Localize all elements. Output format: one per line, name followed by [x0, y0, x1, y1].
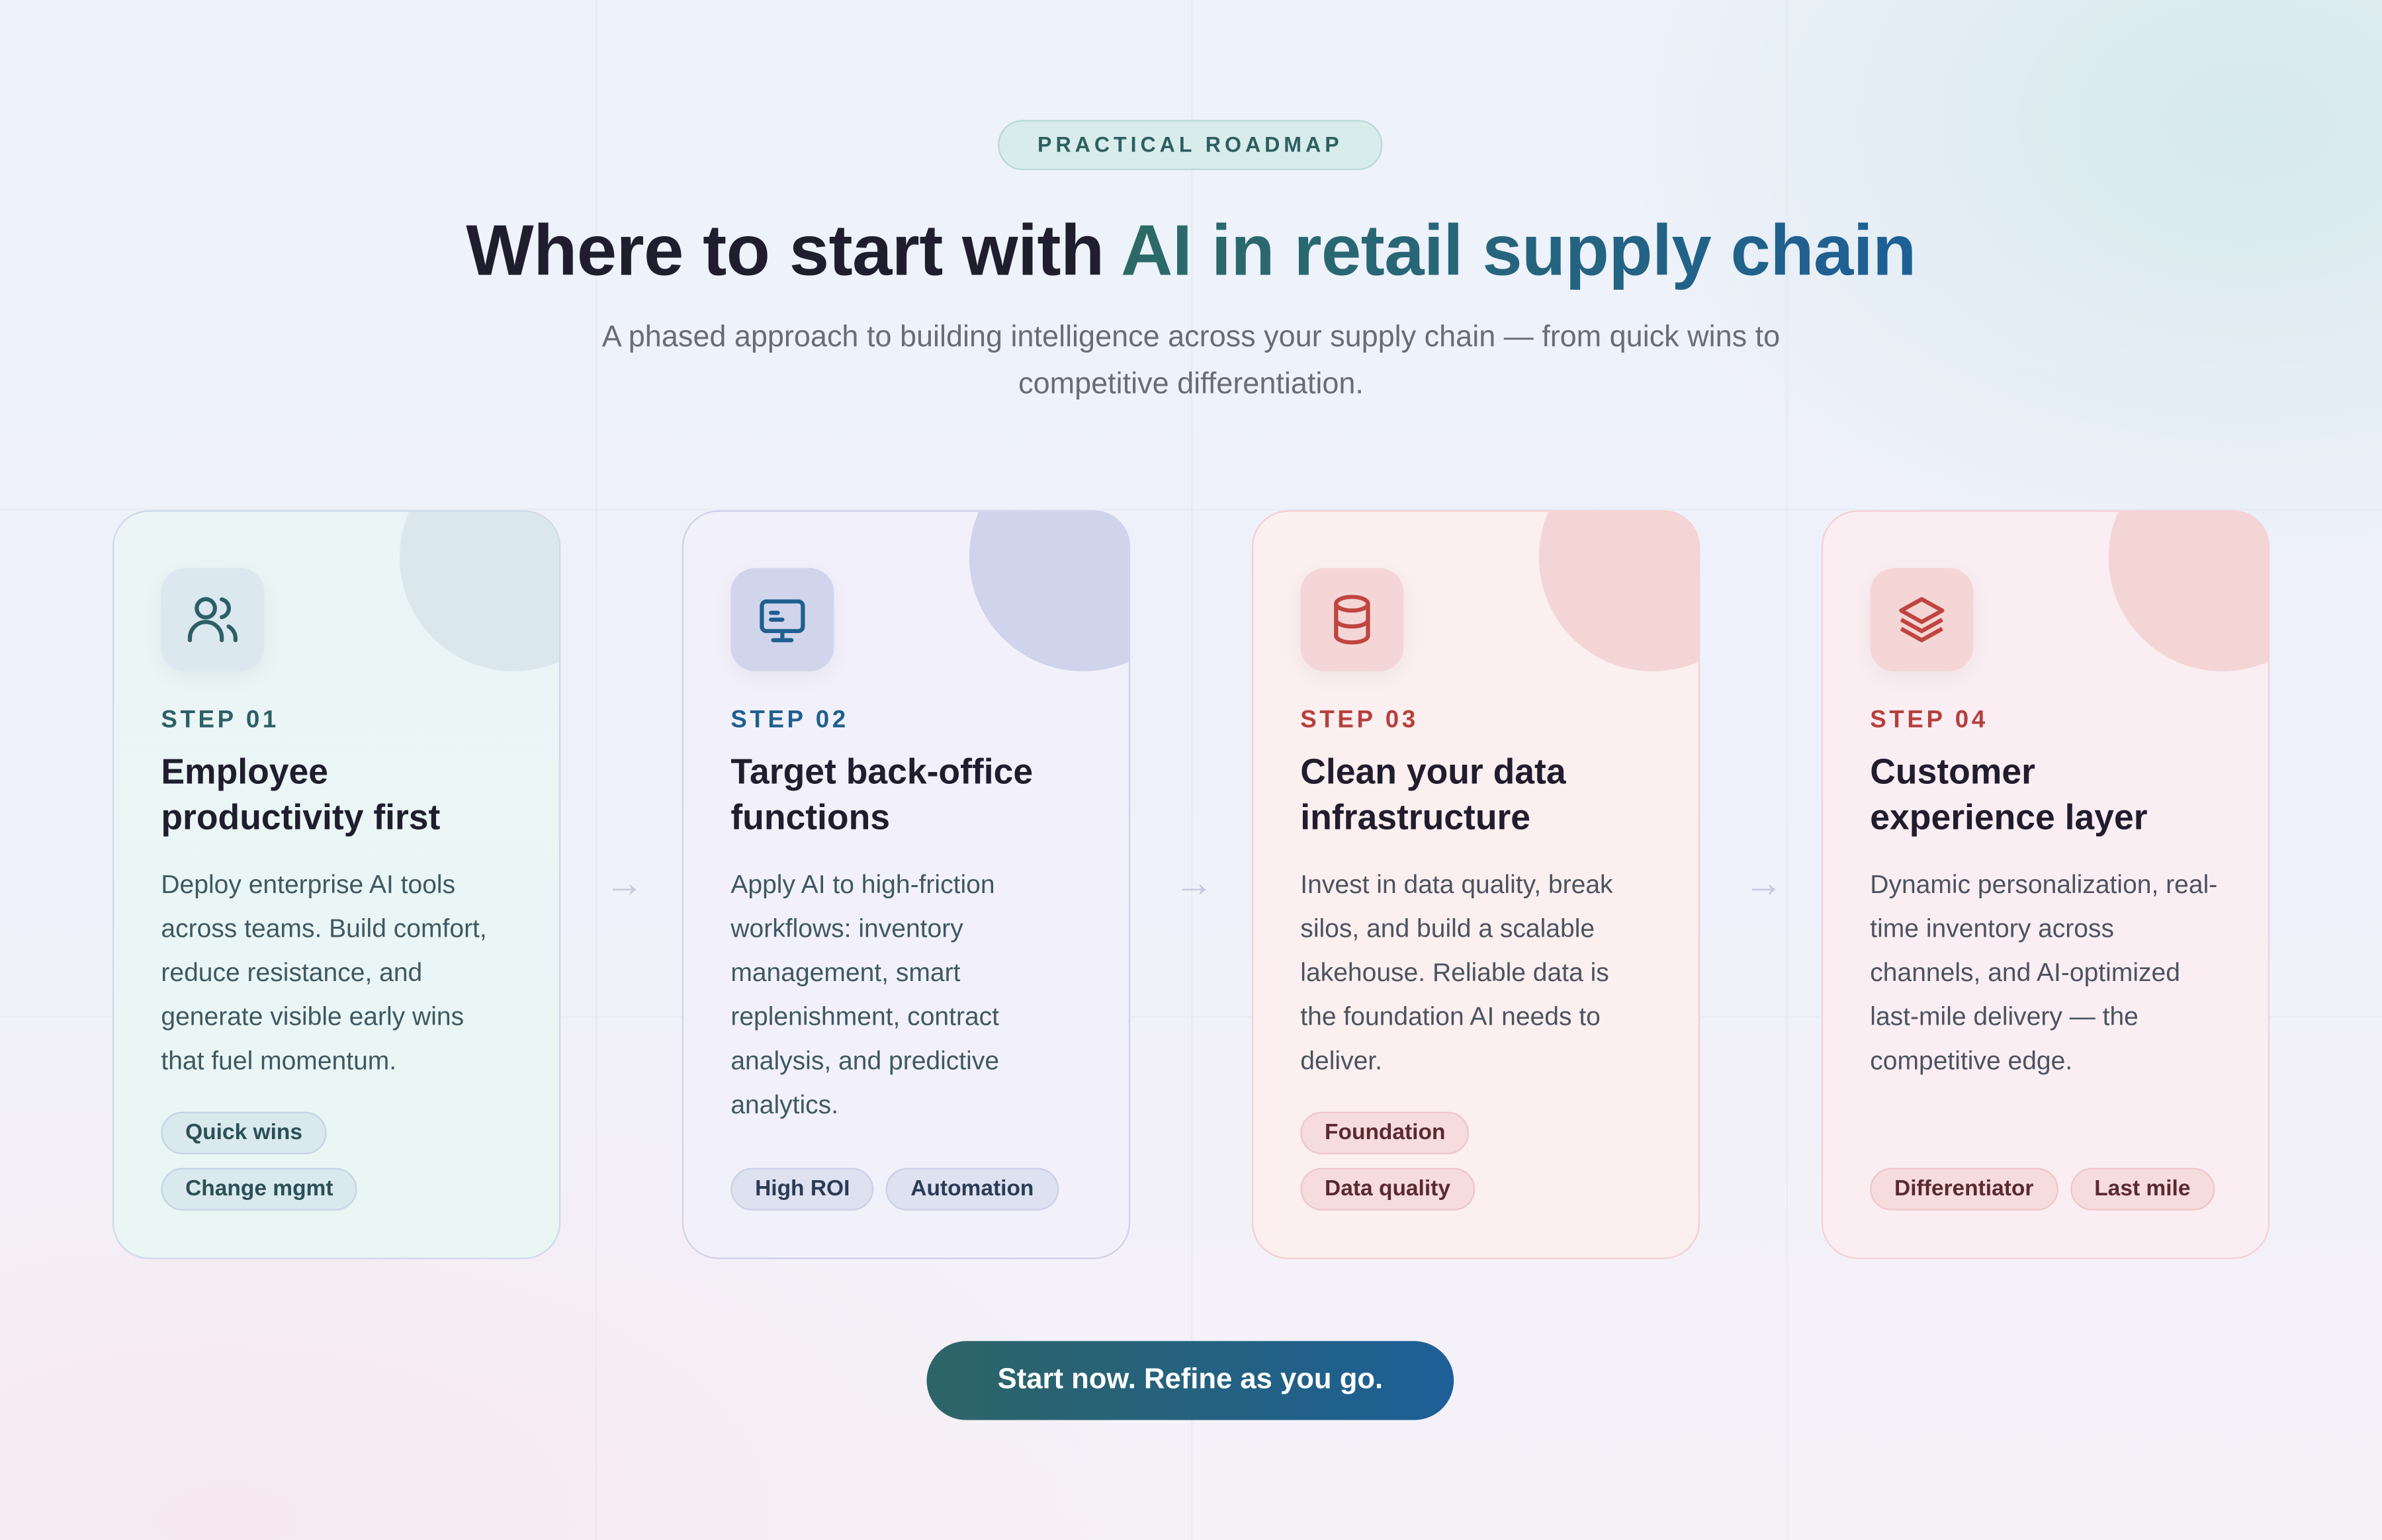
step label: STEP 01 — [161, 708, 279, 734]
subtitle: A phased approach to building intelligence across your supply chain — from quick wins to competitive differentiation. — [602, 320, 1780, 401]
card title: Clean your data infrastructure — [1300, 751, 1566, 837]
tags: High ROI — [755, 1177, 850, 1201]
icon: users — [161, 568, 264, 671]
card title: Employee productivity first — [161, 751, 440, 837]
icon: monitor — [730, 568, 834, 671]
description: Invest in data quality, break silos, and build a scalable lakehouse. Reliable data is the foundation AI needs to deliver. — [1300, 871, 1613, 1076]
step label: STEP 04 — [1870, 708, 1988, 734]
tags: Automation — [910, 1177, 1034, 1201]
step label: STEP 02 — [730, 708, 849, 734]
panel: step 04 — [1822, 510, 2270, 1259]
icon: database — [1300, 568, 1403, 671]
badge — [998, 120, 1382, 170]
card title: Target back-office functions — [730, 751, 1033, 837]
panel: step 02 — [682, 510, 1130, 1259]
tags: Data quality — [1325, 1177, 1450, 1201]
tags: Differentiator — [1894, 1177, 2033, 1201]
card title: Customer experience layer — [1870, 751, 2148, 837]
step label: STEP 03 — [1300, 708, 1419, 734]
call-to-action button — [927, 1341, 1454, 1420]
description: Deploy enterprise AI tools across teams. Build comfort, reduce resistance, and generate visible early wins that fuel momentum. — [161, 871, 487, 1076]
description: Apply AI to high-friction workflows: inventory management, smart replenishment, contract analysis, and predictive analytics. — [730, 871, 999, 1119]
description: Dynamic personalization, real-time inventory across channels, and AI-optimized last-mile delivery — the competitive edge. — [1870, 871, 2217, 1076]
tags: Last mile — [2094, 1177, 2190, 1201]
panel: step 03 — [1252, 510, 1700, 1259]
tags — [730, 1168, 1059, 1211]
tags: Foundation — [1325, 1121, 1445, 1145]
arrow: → — [605, 859, 644, 905]
call-to-action button: Start now. Refine as you go. — [998, 1364, 1383, 1396]
title: Where to start with AI in retail supply chain — [466, 211, 1916, 292]
arrow: → — [1174, 859, 1213, 905]
tags — [1300, 1111, 1476, 1211]
tags: Quick wins — [185, 1121, 302, 1145]
tags — [161, 1111, 357, 1211]
arrow: → — [1744, 859, 1783, 905]
badge: PRACTICAL ROADMAP — [1037, 132, 1343, 156]
icon: layers — [1870, 568, 1973, 671]
tags — [1870, 1168, 2215, 1211]
tags: Change mgmt — [185, 1177, 333, 1201]
panel: step 01 — [112, 510, 560, 1259]
